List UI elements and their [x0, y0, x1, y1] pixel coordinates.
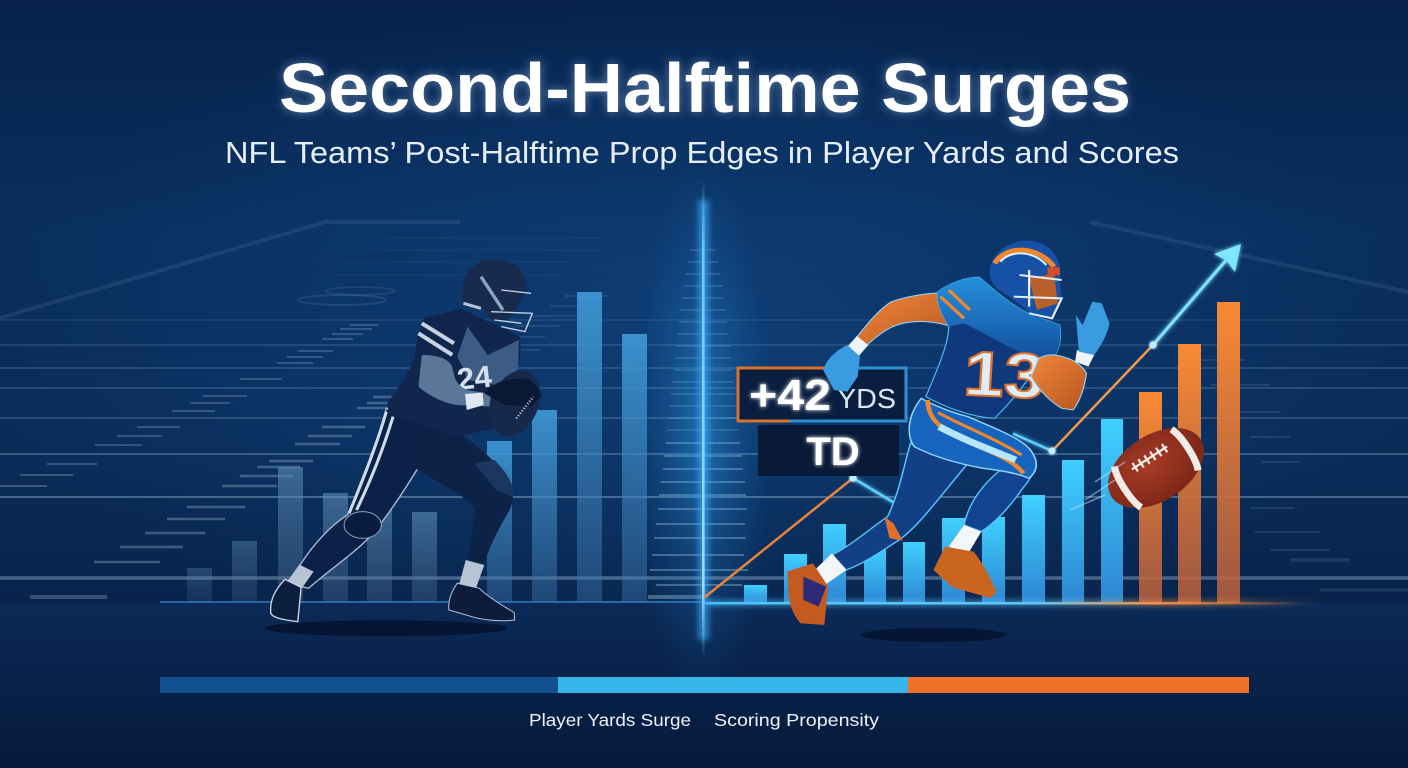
helmet stripes	[481, 277, 503, 310]
helmet	[462, 259, 527, 320]
torso	[387, 308, 521, 437]
legend label: yards: Player Yards Surge	[529, 710, 691, 730]
right bar chart: second half	[744, 302, 1240, 603]
football	[480, 363, 550, 444]
knee band	[884, 517, 903, 541]
sleeve stripes	[418, 323, 454, 355]
pants	[909, 398, 1036, 478]
left bar chart: first half	[187, 292, 647, 602]
jersey number: 24	[455, 359, 493, 397]
legend bar	[160, 677, 1249, 693]
callout: +42 YDS: +42	[749, 371, 831, 420]
trend line with arrow	[705, 244, 1241, 597]
yard hash marks left	[0, 296, 610, 617]
ball stripes	[1111, 427, 1201, 510]
front sock	[459, 560, 484, 588]
forward wristband	[1075, 350, 1094, 367]
yard hash marks centre	[646, 250, 760, 640]
helmet crest	[1047, 267, 1060, 275]
rear arm	[853, 293, 960, 347]
front shoe	[449, 583, 515, 621]
torso	[926, 277, 1060, 418]
node 1	[850, 474, 856, 482]
subtitle: NFL Teams’ Post-Halftime Prop Edges in Player Yards and Scores	[225, 135, 1179, 170]
legend label: scoring: Scoring Propensity	[714, 710, 879, 730]
node 3	[1150, 342, 1156, 348]
facemask	[1014, 270, 1062, 318]
rear wristband	[847, 336, 868, 356]
wristband	[465, 393, 484, 410]
callout: TD: TD	[806, 430, 860, 474]
title: Second-Halftime Surges	[279, 49, 1131, 127]
helmet white stripe	[1000, 253, 1046, 265]
thigh highlight	[474, 460, 513, 497]
right baseline	[705, 600, 1325, 606]
front shin	[964, 468, 1033, 532]
jersey number: 13	[962, 338, 1047, 412]
rear hand	[823, 345, 860, 392]
yard hash marks right	[1190, 360, 1408, 612]
forward arm	[1031, 355, 1087, 410]
rear sock	[814, 553, 846, 584]
field lines	[0, 222, 1408, 578]
helmet edge	[463, 303, 481, 308]
rear shoe	[271, 579, 301, 622]
hand	[484, 378, 542, 407]
rear sock	[287, 565, 314, 588]
callout: +42 YDS: YDS	[837, 383, 896, 414]
sleeve stripes	[940, 290, 970, 318]
motion streaks	[1070, 462, 1125, 510]
ball laces	[1129, 442, 1170, 474]
left player: dark silhouette	[265, 259, 550, 636]
callout: TD	[758, 425, 899, 476]
chest shading	[457, 327, 519, 387]
laces	[516, 397, 533, 418]
helmet	[990, 241, 1062, 317]
rear leg	[287, 408, 461, 588]
helmet orange stripe	[995, 250, 1054, 267]
ground	[0, 603, 1408, 768]
forward hand	[1076, 302, 1109, 355]
front leg	[417, 420, 513, 563]
football	[1094, 411, 1218, 525]
front sock	[949, 525, 981, 554]
rear knee	[344, 512, 381, 538]
rear leg stripes	[349, 412, 393, 513]
rear shoe	[787, 563, 828, 625]
front shoe	[933, 547, 997, 598]
pants stripes	[928, 400, 1023, 473]
jersey upper	[937, 277, 1060, 358]
node 2	[1048, 448, 1056, 454]
facemask	[491, 290, 532, 332]
rear leg	[832, 443, 968, 570]
rear shoe panel	[803, 577, 826, 607]
callout: +42 YDS	[738, 367, 907, 422]
left baseline	[160, 601, 705, 603]
face	[1029, 273, 1058, 310]
shadow	[861, 628, 1006, 642]
arm	[418, 355, 491, 407]
shadow	[265, 620, 508, 636]
right player: coloured runner	[787, 241, 1109, 642]
arrow head	[1214, 244, 1241, 272]
central halftime divider	[633, 160, 773, 700]
